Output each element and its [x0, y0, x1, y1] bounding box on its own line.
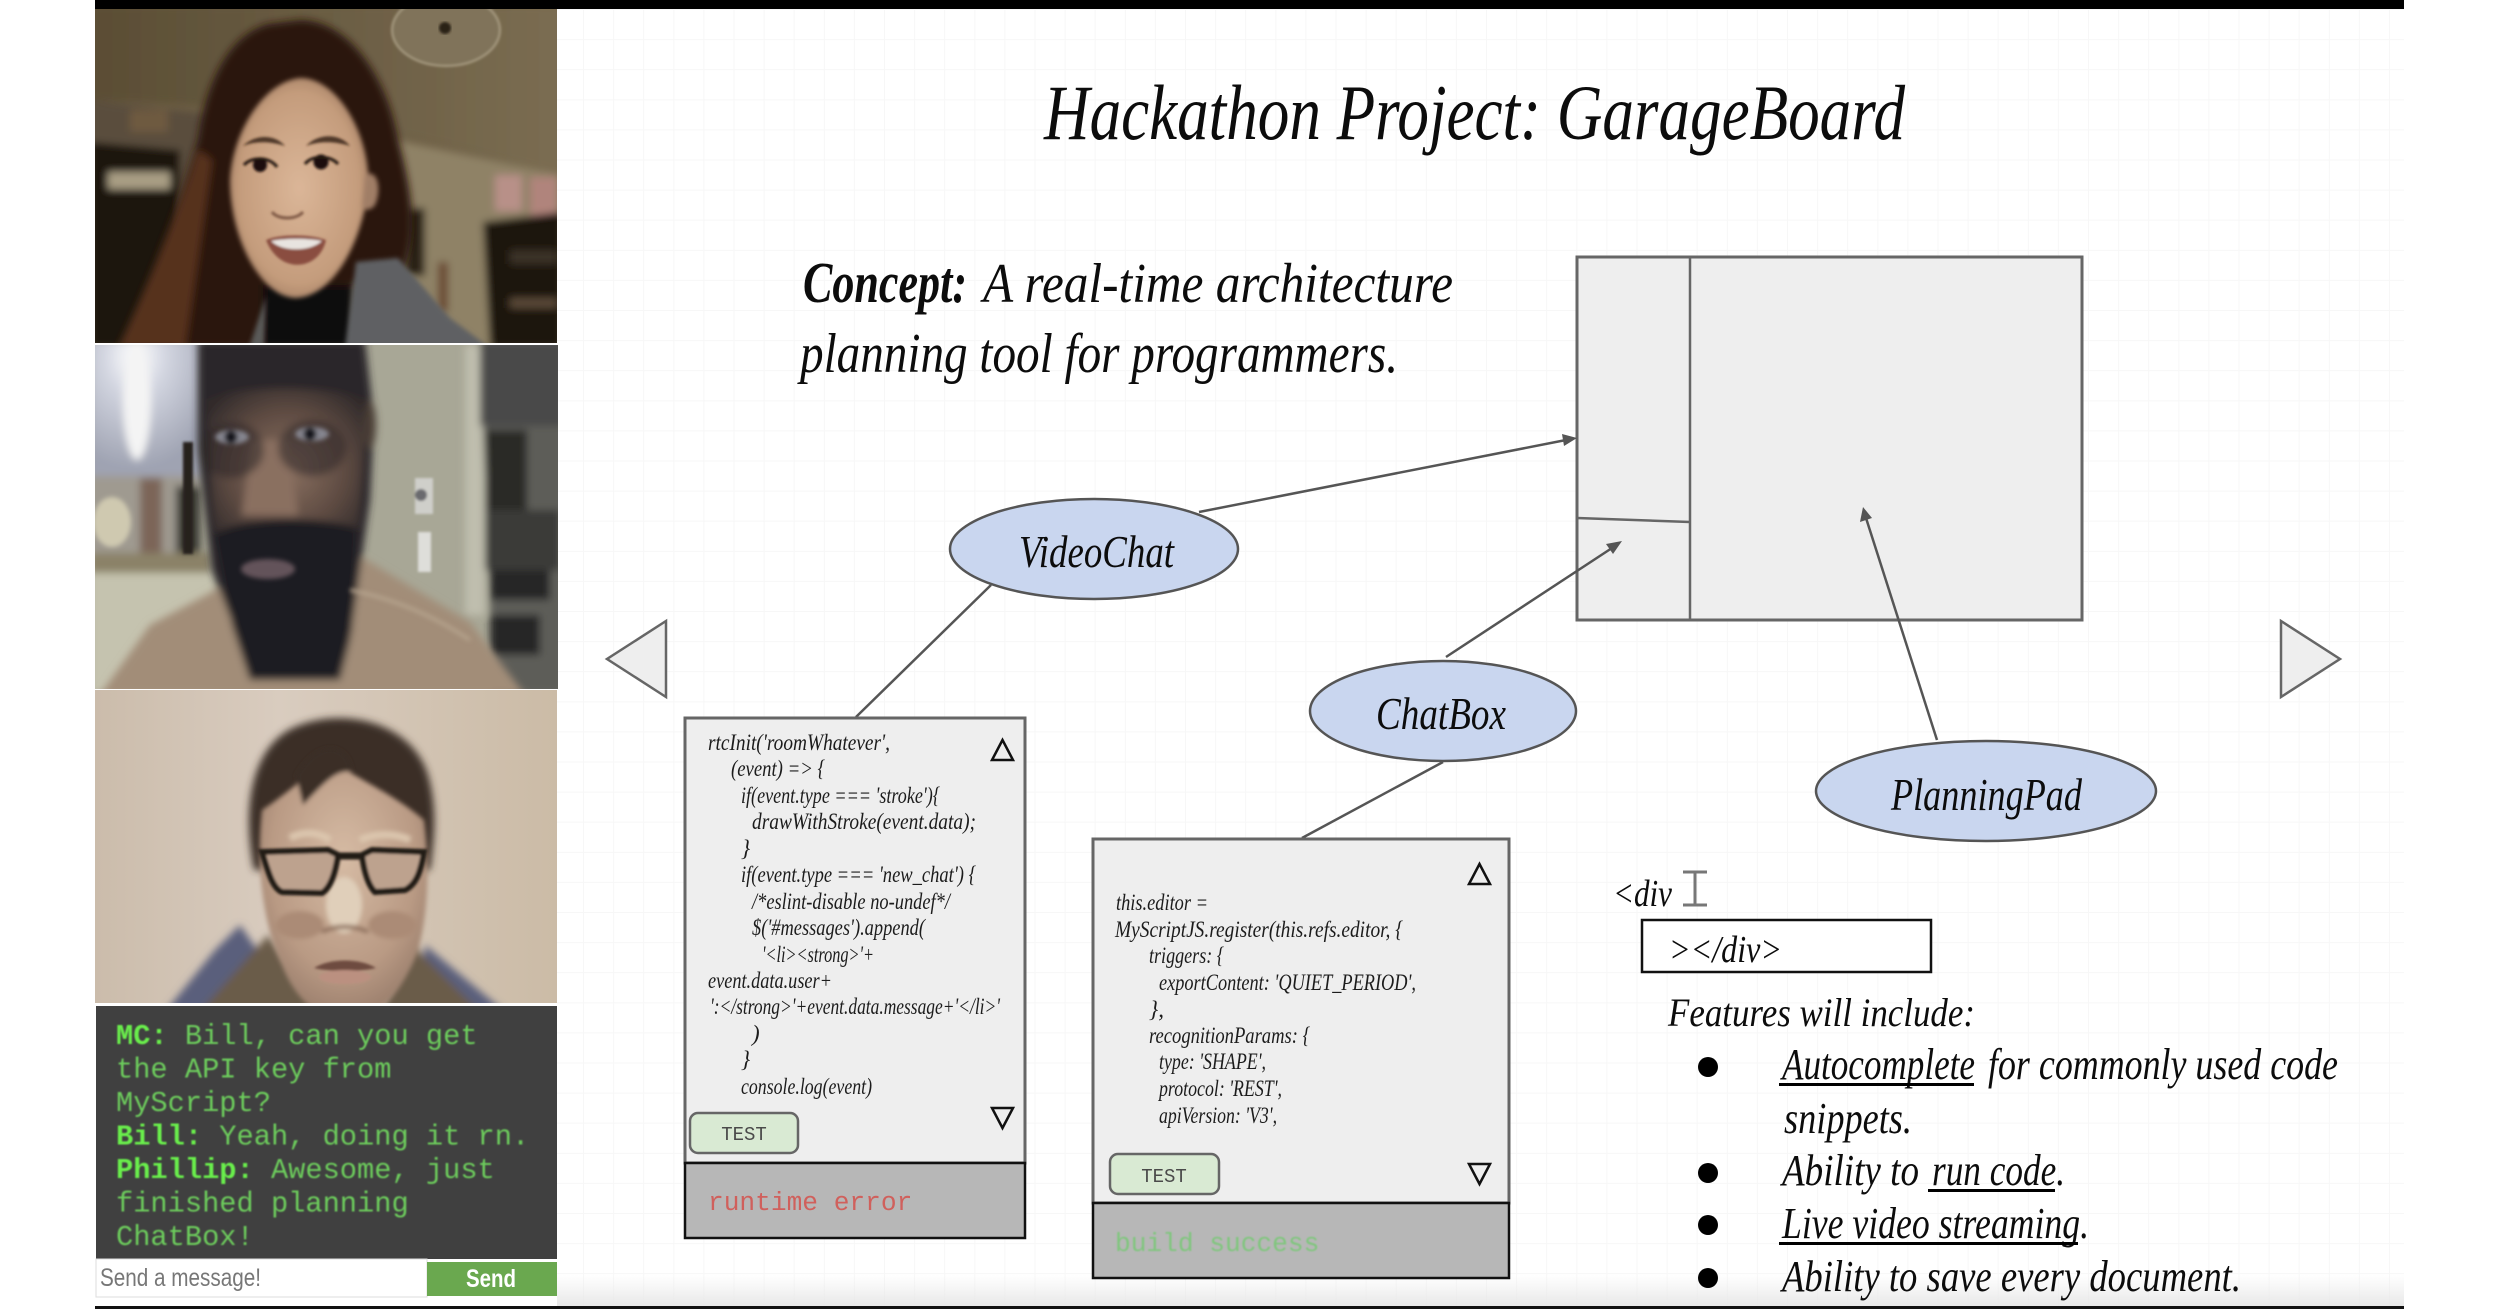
node: VideoChat: VideoChat	[1019, 526, 1175, 577]
code text: ':</strong>'+event.data.message+'</li>'	[710, 994, 1001, 1019]
video tile: MC	[90, 0, 562, 348]
concept statement: planning tool for programmers.	[797, 323, 1398, 385]
coffee mug	[93, 497, 131, 547]
code text: event.data.user+	[708, 968, 832, 993]
code text: if(event.type === 'stroke'){	[741, 783, 940, 808]
features list: Features will include:	[1667, 990, 1975, 1035]
code text: MyScriptJS.register(this.refs.editor, {	[1114, 917, 1403, 942]
panel: ChatBox code editor	[1093, 839, 1509, 1278]
feature: video streaming: Live video streaming.	[1781, 1199, 2089, 1248]
message input and send button	[96, 1259, 557, 1297]
icon: scroll down	[1469, 1164, 1490, 1184]
connector: ChatBox to code editor	[1302, 762, 1443, 838]
feature: autocomplete: for commonly used code	[1988, 1040, 2338, 1089]
chat messages: Phillip:	[116, 1154, 254, 1187]
test button: TEST	[1141, 1166, 1187, 1188]
chat messages: ChatBox!	[116, 1221, 254, 1254]
console: runtime error: runtime error	[708, 1188, 912, 1218]
concept statement	[797, 250, 1453, 385]
test button: TEST	[721, 1124, 767, 1146]
arrow: VideoChat to wireframe	[1199, 434, 1577, 512]
code text: apiVersion: 'V3',	[1159, 1103, 1277, 1128]
chat messages: Bill, can you get	[168, 1020, 478, 1053]
arrow: PlanningPad to wireframe	[1860, 507, 1937, 740]
panel: VideoChat code editor	[685, 718, 1025, 1238]
code text: )	[750, 1021, 760, 1046]
console: build success: build success	[1115, 1229, 1319, 1259]
feature: save documents: Ability to save every document.	[1780, 1252, 2241, 1301]
node: ChatBox	[1310, 661, 1576, 761]
autocomplete demo: ></div>	[1669, 929, 1782, 971]
video tile: Bill	[90, 340, 565, 695]
code text: /*eslint-disable no-undef*/	[750, 889, 952, 914]
code text: exportContent: 'QUIET_PERIOD',	[1159, 970, 1416, 995]
window top bar	[95, 0, 2404, 9]
concept statement: A real-time architecture	[979, 253, 1453, 315]
code text: rtcInit('roomWhatever',	[708, 730, 890, 755]
code text	[708, 730, 1001, 1099]
code text: this.editor =	[1116, 890, 1208, 915]
connector: VideoChat to code editor	[856, 585, 991, 717]
feature: autocomplete: snippets.	[1784, 1094, 1912, 1143]
code text: $('#messages').append(	[752, 915, 926, 940]
code text: (event) => {	[731, 756, 825, 781]
code text: },	[1149, 997, 1164, 1022]
chat messages: finished planning	[116, 1188, 409, 1220]
feature: autocomplete: Autocomplete	[1780, 1040, 1975, 1089]
console: build success	[1093, 1203, 1509, 1278]
code text: type: 'SHAPE',	[1159, 1049, 1266, 1074]
whiteboard background grid	[557, 9, 2404, 1308]
test button	[1110, 1154, 1219, 1194]
message input and send button: Send	[466, 1265, 516, 1293]
autocomplete demo	[1613, 872, 1931, 972]
features list	[1667, 990, 2338, 1301]
icon: scroll up	[1469, 864, 1490, 884]
feature: run code: run code.	[1932, 1146, 2065, 1195]
autocomplete demo: <div	[1613, 873, 1672, 915]
feature: run code	[1698, 1146, 2065, 1195]
icon: scroll up	[992, 740, 1013, 760]
chat messages: the API key from	[116, 1054, 391, 1086]
feature: run code: Ability to	[1779, 1146, 1919, 1195]
node: VideoChat	[950, 499, 1238, 599]
icon: previous slide arrow	[607, 621, 666, 697]
layout wireframe	[1577, 257, 2082, 620]
code text: '<li><strong>'+	[762, 942, 874, 967]
code text: recognitionParams: {	[1149, 1023, 1310, 1048]
code text: console.log(event)	[741, 1074, 872, 1099]
chat messages: Awesome, just	[254, 1154, 495, 1187]
chat messages: Yeah, doing it rn.	[202, 1120, 529, 1154]
code text: if(event.type === 'new_chat') {	[741, 862, 976, 887]
console: runtime error	[685, 1163, 1025, 1238]
video tile: Phillip	[95, 690, 557, 1020]
window bottom edge	[95, 1306, 2404, 1309]
concept statement: Concept:	[803, 250, 967, 315]
node: PlanningPad: PlanningPad	[1890, 769, 2083, 820]
title: Hackathon Project: GarageBoard	[1043, 69, 1906, 156]
feature: autocomplete	[1698, 1040, 2338, 1143]
chat messages: MC:	[116, 1020, 168, 1053]
feature: video streaming	[1698, 1199, 2089, 1248]
icon: text cursor	[1683, 872, 1707, 905]
code text: protocol: 'REST',	[1157, 1076, 1282, 1101]
arrow: ChatBox to wireframe	[1446, 541, 1622, 657]
icon: next slide arrow	[2281, 621, 2340, 697]
chat messages: Bill:	[116, 1120, 202, 1154]
icon: scroll down	[992, 1108, 1013, 1128]
node: ChatBox: ChatBox	[1376, 688, 1506, 739]
code text: }	[741, 836, 750, 861]
code text: drawWithStroke(event.data);	[752, 809, 976, 834]
message input and send button: Send a message!	[100, 1264, 261, 1292]
chat messages: MyScript?	[116, 1087, 271, 1120]
node: PlanningPad	[1816, 741, 2156, 841]
ceiling lamp	[392, 0, 500, 66]
code input box	[1642, 920, 1931, 972]
chat panel	[96, 1006, 557, 1259]
code text	[1114, 890, 1416, 1128]
code text: triggers: {	[1149, 943, 1224, 968]
test button	[690, 1113, 798, 1153]
code text: }	[741, 1047, 750, 1072]
